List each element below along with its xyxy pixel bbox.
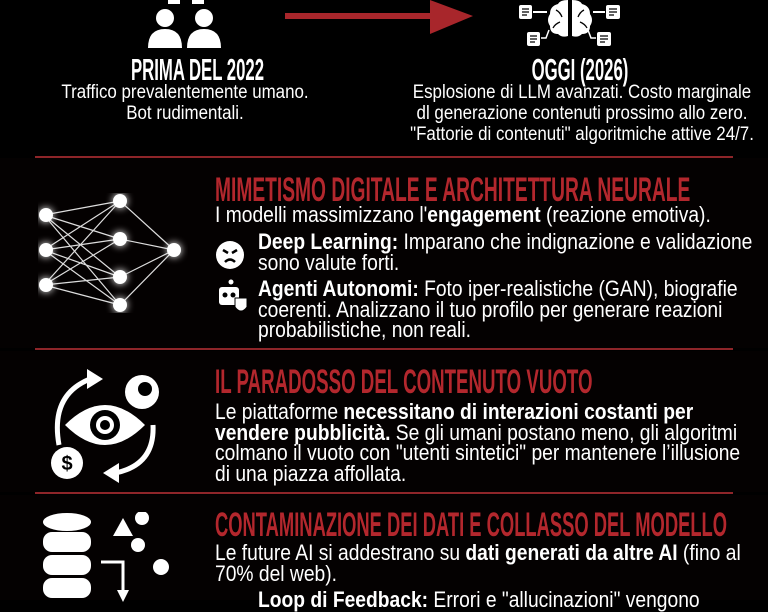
- bullet: deep learning: sono valute forti.: [258, 250, 399, 275]
- icon: angry face: [216, 241, 244, 269]
- bullet: agenti: Agenti Autonomi: Foto iper-realistiche (GAN), biografie: [258, 276, 738, 301]
- text: vendere pubblicità. Se gli umani postano meno, gli algoritmi: [215, 420, 737, 445]
- text: oggi: dl generazione contenuti prossimo allo zero.: [417, 103, 747, 124]
- panel: paradosso: [51, 363, 740, 486]
- bullet: deep learning: Deep Learning: Imparano che indignazione e validazione: [258, 229, 752, 254]
- heading: oggi: OGGI (2026): [532, 52, 628, 87]
- text: colmano il vuoto con "utenti sintetici" per mantenere l’illusione: [215, 440, 740, 465]
- text: oggi: "Fattorie di contenuti" algoritmiche attive 24/7.: [410, 124, 754, 145]
- icon: database: [43, 512, 169, 602]
- heading: MIMETISMO DIGITALE E ARCHITETTURA NEURALE: [215, 171, 690, 209]
- icon: eye cycle: [51, 369, 159, 483]
- text: Le piattaforme necessitano di interazioni costanti per: [215, 399, 693, 424]
- bullet: agenti: coerenti. Analizzano il tuo profilo per generare reazioni: [258, 297, 722, 322]
- text: oggi: [410, 82, 754, 145]
- heading: IL PARADOSSO DEL CONTENUTO VUOTO: [215, 363, 593, 401]
- bullet: agenti: probabilistiche, non reali.: [258, 317, 471, 342]
- text: 70% del web).: [215, 561, 337, 586]
- text: prima: [61, 82, 309, 124]
- heading: CONTAMINAZIONE DEI DATI E COLLASSO DEL MODELLO: [215, 506, 727, 544]
- icon: neural network: [38, 193, 187, 313]
- bullet: deep learning: [258, 229, 752, 275]
- text: di una piazza affollata.: [215, 461, 406, 486]
- bullet: agenti: [258, 276, 738, 342]
- text: Le future AI si addestrano su dati generati da altre AI (fino al: [215, 540, 741, 565]
- icon: eye cycle: $: [61, 453, 73, 475]
- panel: contaminazione: [43, 506, 741, 612]
- text: oggi: Esplosione di LLM avanzati. Costo marginale: [413, 82, 751, 103]
- arrow: [285, 0, 473, 34]
- icon: robot: [219, 280, 246, 310]
- icon: brain with docs: [519, 0, 620, 46]
- text: I modelli massimizzano l'engagement (reazione emotiva).: [215, 202, 711, 227]
- text: prima: Bot rudimentali.: [126, 103, 244, 124]
- heading: prima del 2022: PRIMA DEL 2022: [131, 52, 264, 87]
- bullet: loop: Loop di Feedback: Errori e "allucinazioni" vengono: [258, 587, 700, 612]
- text: [215, 540, 741, 586]
- text: [215, 399, 740, 486]
- text: prima: Traffico prevalentemente umano.: [61, 82, 309, 103]
- icon: people: [148, 0, 221, 48]
- panel: mimetismo: [38, 171, 752, 342]
